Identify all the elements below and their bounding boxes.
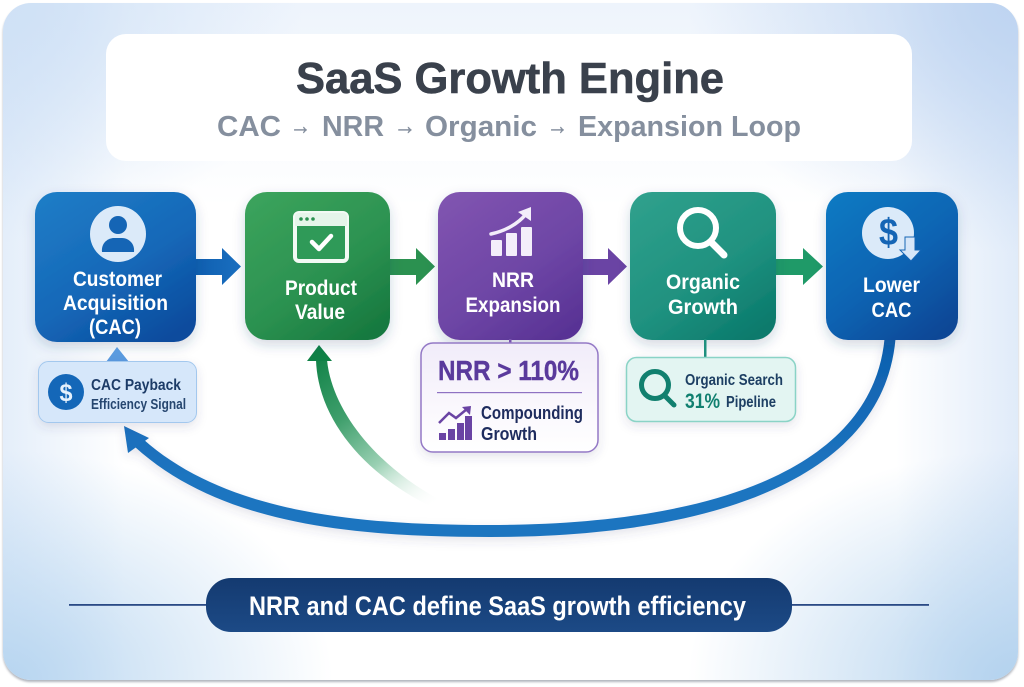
icon: dollar coin: $ (60, 379, 73, 407)
subtitle (217, 111, 801, 143)
label: NRR (492, 269, 534, 292)
callout text: 31% (685, 390, 720, 413)
label: Lower (863, 274, 920, 297)
subtitle: Expansion Loop (578, 111, 801, 143)
callout: organic search (626, 339, 796, 422)
label: Value (295, 301, 345, 324)
callout text: Compounding (481, 403, 583, 423)
NRR value: NRR > 110% (438, 355, 579, 386)
label: Product (285, 277, 357, 300)
flow arrow: CAC to Product (196, 248, 241, 285)
title panel (106, 34, 912, 161)
callout text: CAC Payback (91, 377, 181, 394)
flow arrow: Product to NRR (390, 248, 435, 285)
panel: organic growth (630, 192, 776, 340)
panel: NRR expansion (438, 192, 583, 340)
flow arrow: Organic to Lower CAC (776, 248, 823, 285)
icon: magnifier (680, 210, 724, 255)
label (666, 271, 740, 319)
feedback arrow: blue loop from Lower CAC to CAC Payback (124, 339, 896, 537)
icon: user (90, 206, 146, 262)
label: Growth (668, 296, 738, 319)
icon: magnifier (642, 372, 674, 405)
label: Customer (73, 268, 162, 291)
callout text: Growth (481, 424, 537, 444)
callout text (91, 377, 186, 413)
icon: dollar down: $ (879, 212, 898, 254)
icon: dollar down (862, 207, 921, 261)
icon: dollar coin (48, 374, 84, 410)
title: SaaS Growth Engine (296, 54, 724, 103)
subtitle: → (547, 112, 568, 140)
icon: browser check (295, 213, 347, 261)
callout: NRR target (421, 339, 598, 452)
label (63, 268, 168, 339)
conclusion banner (69, 578, 929, 632)
label: Acquisition (63, 292, 168, 315)
subtitle: NRR (322, 111, 384, 143)
label (863, 274, 920, 322)
callout text (481, 403, 583, 444)
label (285, 277, 357, 324)
label: (CAC) (89, 316, 141, 339)
callout text: Efficiency Signal (91, 397, 186, 413)
panel: product value (245, 192, 390, 340)
callout text: Pipeline (726, 394, 776, 411)
callout: CAC payback (38, 347, 196, 422)
icon: growth chart (491, 207, 532, 256)
subtitle: → (394, 112, 416, 140)
subtitle: CAC (217, 111, 281, 143)
callout text: Organic Search (685, 372, 783, 389)
callout text (685, 372, 783, 413)
panel: customer acquisition (35, 192, 196, 342)
conclusion banner: NRR and CAC define SaaS growth efficiency (249, 591, 746, 621)
feedback arrow: green curve to Product Value (307, 345, 440, 508)
icon: compounding chart (439, 406, 472, 440)
label (466, 269, 560, 317)
label: Expansion (466, 294, 560, 317)
label: CAC (872, 299, 912, 322)
flow arrow: NRR to Organic (583, 248, 627, 285)
subtitle: Organic (425, 111, 537, 143)
subtitle: → (290, 112, 311, 140)
panel: lower CAC (826, 192, 958, 340)
label: Organic (666, 271, 740, 294)
